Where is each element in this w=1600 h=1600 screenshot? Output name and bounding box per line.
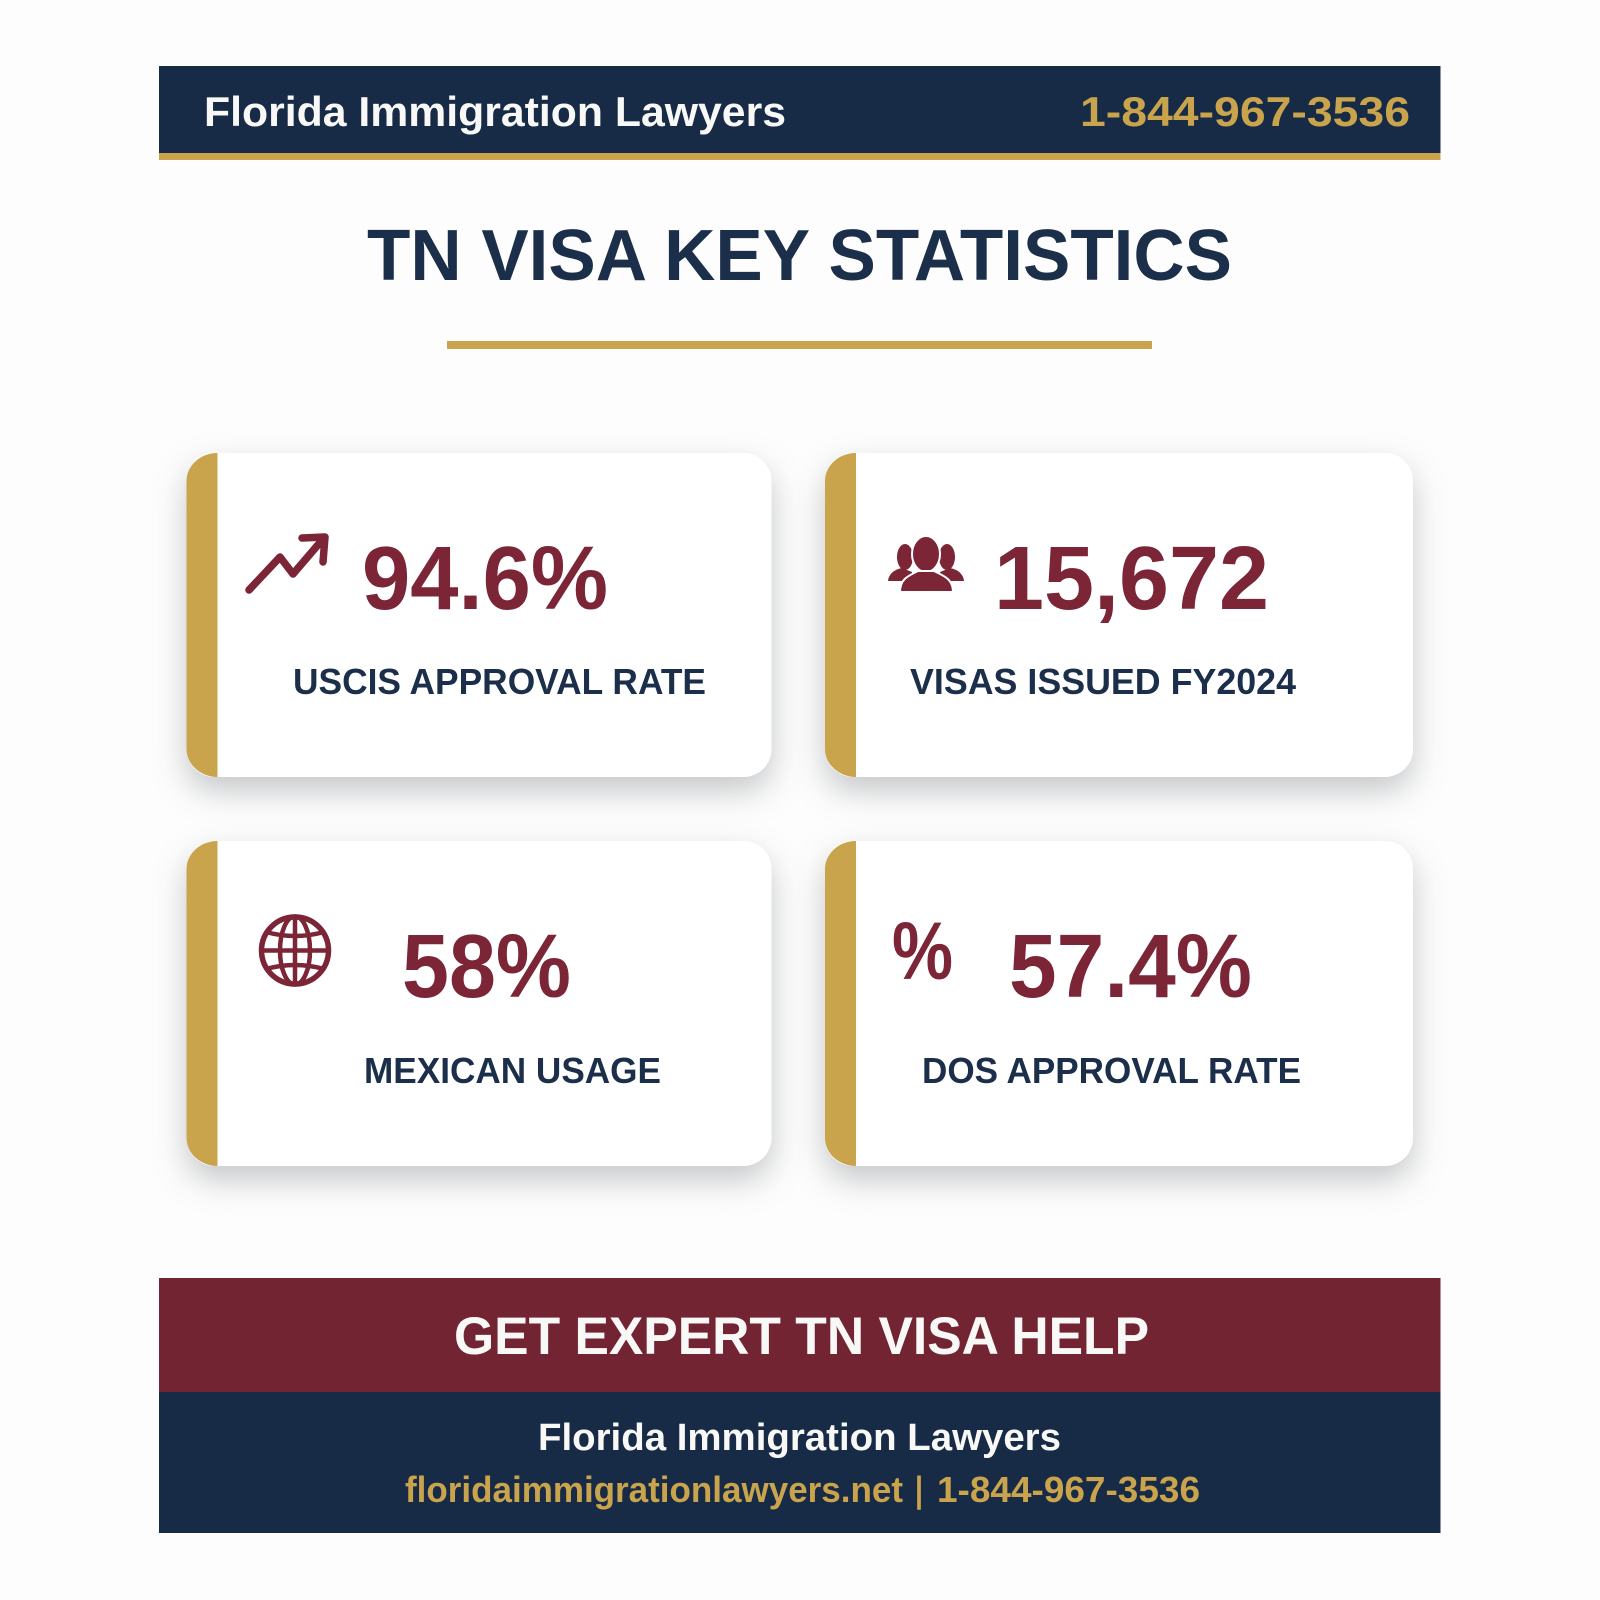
footer website and phone: | bbox=[915, 1469, 923, 1511]
stat label: DOS APPROVAL RATE bbox=[922, 1050, 1301, 1091]
title: TN VISA KEY STATISTICS bbox=[367, 216, 1232, 296]
icon: percent sign: % bbox=[892, 906, 953, 997]
stat label: VISAS ISSUED FY2024 bbox=[910, 661, 1297, 702]
stat value: 94.6% bbox=[362, 529, 608, 629]
footer website and phone bbox=[405, 1469, 1200, 1511]
footer panel bbox=[159, 1392, 1440, 1533]
stat value: 15,672 bbox=[994, 529, 1269, 629]
header phone number: 1-844-967-3536 bbox=[1080, 88, 1410, 135]
header firm name: Florida Immigration Lawyers bbox=[204, 88, 786, 135]
panel: DOS approval rate bbox=[825, 841, 1413, 1166]
footer website and phone: floridaimmigrationlawyers.net bbox=[405, 1469, 903, 1510]
panel: visas issued bbox=[825, 453, 1413, 777]
stat value: 58% bbox=[402, 917, 571, 1017]
header bar bbox=[159, 66, 1440, 160]
call to action banner bbox=[159, 1278, 1440, 1392]
stat value: 57.4% bbox=[1009, 917, 1252, 1017]
call to action heading: GET EXPERT TN VISA HELP bbox=[454, 1307, 1149, 1366]
icon: globe bbox=[261, 916, 329, 985]
title underline bbox=[447, 341, 1152, 349]
footer firm name: Florida Immigration Lawyers bbox=[538, 1417, 1061, 1459]
icon: people group bbox=[888, 536, 964, 592]
icon: trending up arrow bbox=[249, 537, 325, 590]
stat label: USCIS APPROVAL RATE bbox=[293, 661, 706, 702]
footer website and phone: 1-844-967-3536 bbox=[937, 1469, 1200, 1510]
panel: Mexican usage bbox=[186, 841, 772, 1166]
stat label: MEXICAN USAGE bbox=[364, 1050, 661, 1091]
panel: USCIS approval rate bbox=[186, 453, 772, 777]
